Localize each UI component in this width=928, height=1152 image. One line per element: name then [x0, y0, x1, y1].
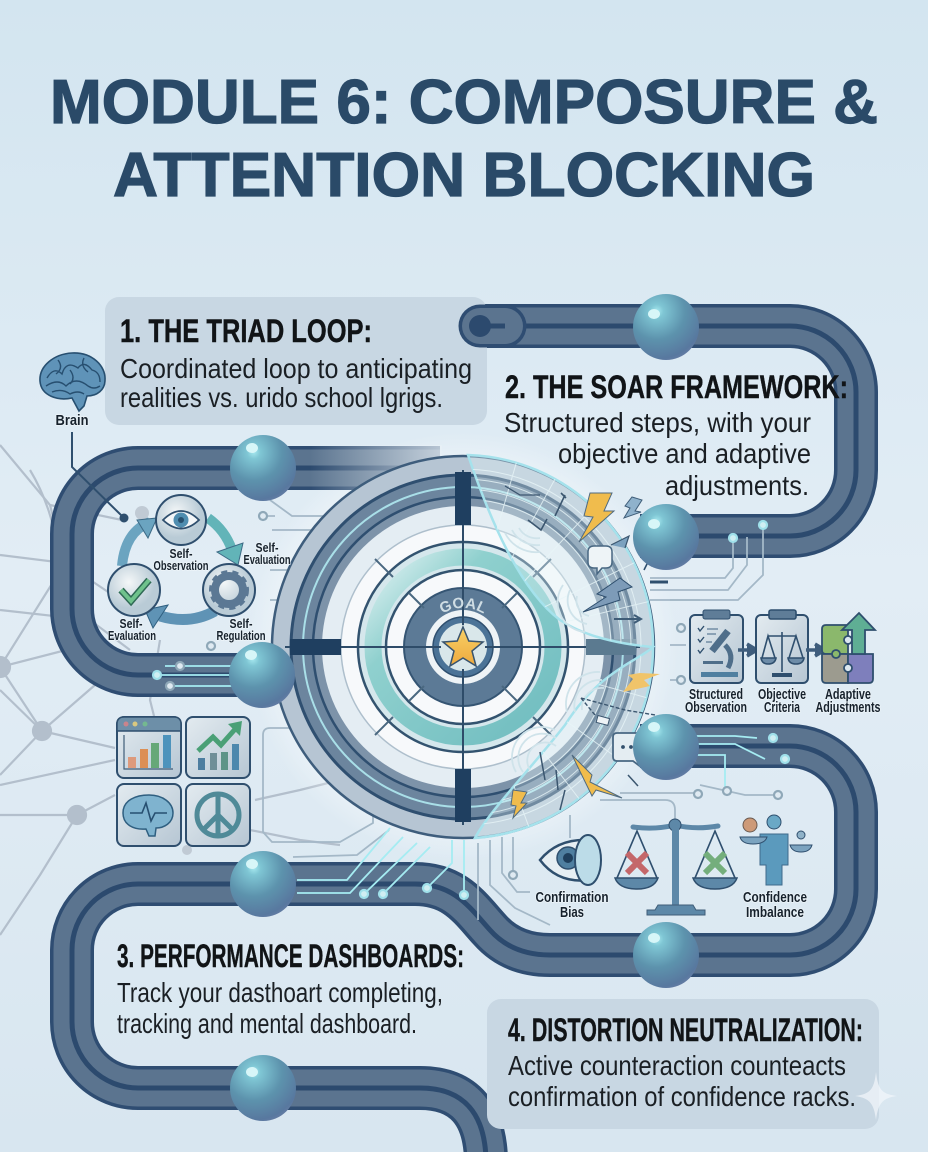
crosshair lines and bars: [285, 470, 640, 825]
distortion icons: Confirmation: [536, 890, 608, 906]
distortion icons: [536, 815, 812, 921]
icon: eye: [156, 495, 206, 545]
triad loop diagram: [108, 495, 291, 643]
triad loop diagram: Evaluation: [108, 628, 156, 643]
soar icons: Criteria: [764, 700, 801, 716]
triad loop diagram: Regulation: [216, 628, 266, 643]
dial halo: [248, 432, 678, 862]
icon: brain: [40, 353, 128, 522]
soar icons: Objective: [758, 687, 806, 703]
lightning bolts: [579, 493, 614, 542]
triad loop diagram: Self-: [120, 616, 142, 631]
icon: peace sign: [197, 794, 239, 836]
icon: brain: Brain: [56, 413, 88, 429]
title: ATTENTION BLOCKING: [113, 141, 815, 210]
panel: the soar framework: adjustments.: [665, 470, 809, 501]
icon: clipboard scales: [761, 610, 804, 675]
panel: the soar framework: objective and adaptive: [558, 438, 811, 469]
panel: the triad loop: 1. THE TRIAD LOOP:: [120, 313, 372, 349]
panel: distortion neutralization: [487, 999, 879, 1129]
triad loop diagram: Evaluation: [244, 552, 291, 567]
triad loop diagram: Self-: [230, 616, 252, 631]
glass overlay with distractions: [466, 454, 660, 840]
icon: growth chart: [198, 721, 242, 770]
soar icons: Adjustments: [816, 700, 880, 716]
panel: performance dashboards: tracking and mental dashboard.: [117, 1008, 417, 1039]
panel: the soar framework: [504, 369, 848, 501]
triad loop diagram: Self-: [256, 540, 278, 555]
icon: person balancing: [740, 815, 812, 885]
title: [50, 68, 878, 210]
icon: balance scale: [615, 819, 737, 915]
triad loop diagram: Observation: [154, 558, 209, 573]
arrow: [806, 644, 825, 656]
sonar arcs: [505, 528, 604, 772]
icon: eye with lens: [557, 835, 601, 885]
title: MODULE 6: COMPOSURE &: [50, 68, 878, 137]
panel: performance dashboards: Track your dasthoart completing,: [117, 977, 443, 1008]
goal label: GOAL: [440, 598, 484, 614]
panel: the triad loop: realities vs. urido school lgrigs.: [120, 382, 443, 413]
distortion icons: Imbalance: [746, 905, 804, 921]
track: top right bend: [480, 326, 856, 536]
icon: gear: [203, 564, 255, 616]
panel: performance dashboards: [117, 938, 464, 1039]
panel: the soar framework: Structured steps, with your: [504, 407, 811, 438]
panel: the triad loop: Coordinated loop to anticipating: [120, 353, 472, 384]
panel: distortion neutralization: Active counteraction counteacts: [508, 1050, 846, 1081]
speech bubbles: [588, 546, 612, 574]
icon: check: [108, 564, 160, 616]
star: [443, 627, 483, 666]
panel: performance dashboards: 3. PERFORMANCE DASHBOARDS:: [117, 938, 464, 974]
panel: the triad loop: [105, 297, 487, 425]
icon: bar chart: [117, 717, 181, 769]
icon: clipboard microscope: [698, 610, 738, 677]
track: left loop: [72, 445, 442, 675]
icon: brain activity: [123, 795, 173, 836]
distortion icons: Confidence: [743, 890, 807, 906]
soar icons: Observation: [685, 700, 747, 716]
central goal dial: [270, 454, 656, 840]
soar icons: Adaptive: [825, 687, 871, 703]
triad loop diagram: Self-: [170, 546, 192, 561]
arrow: [738, 644, 757, 656]
track: lower serpentine: [72, 746, 856, 1152]
panel: the soar framework: 2. THE SOAR FRAMEWORK:: [505, 369, 848, 405]
panel: distortion neutralization: confirmation of confidence racks.: [508, 1081, 856, 1112]
sparkle mark: [855, 1072, 897, 1120]
spheres: [229, 294, 699, 1121]
network graph backdrop: [0, 445, 340, 935]
soar icons: Structured: [689, 687, 743, 703]
circuit traces: [153, 500, 789, 925]
dashboard icons: [117, 717, 250, 846]
icon: puzzle and arrow: [822, 613, 875, 683]
distortion icons: Bias: [560, 905, 584, 921]
arrows and small doodles: [528, 493, 566, 530]
soar icons: [685, 610, 880, 716]
track start cap: [469, 315, 505, 337]
